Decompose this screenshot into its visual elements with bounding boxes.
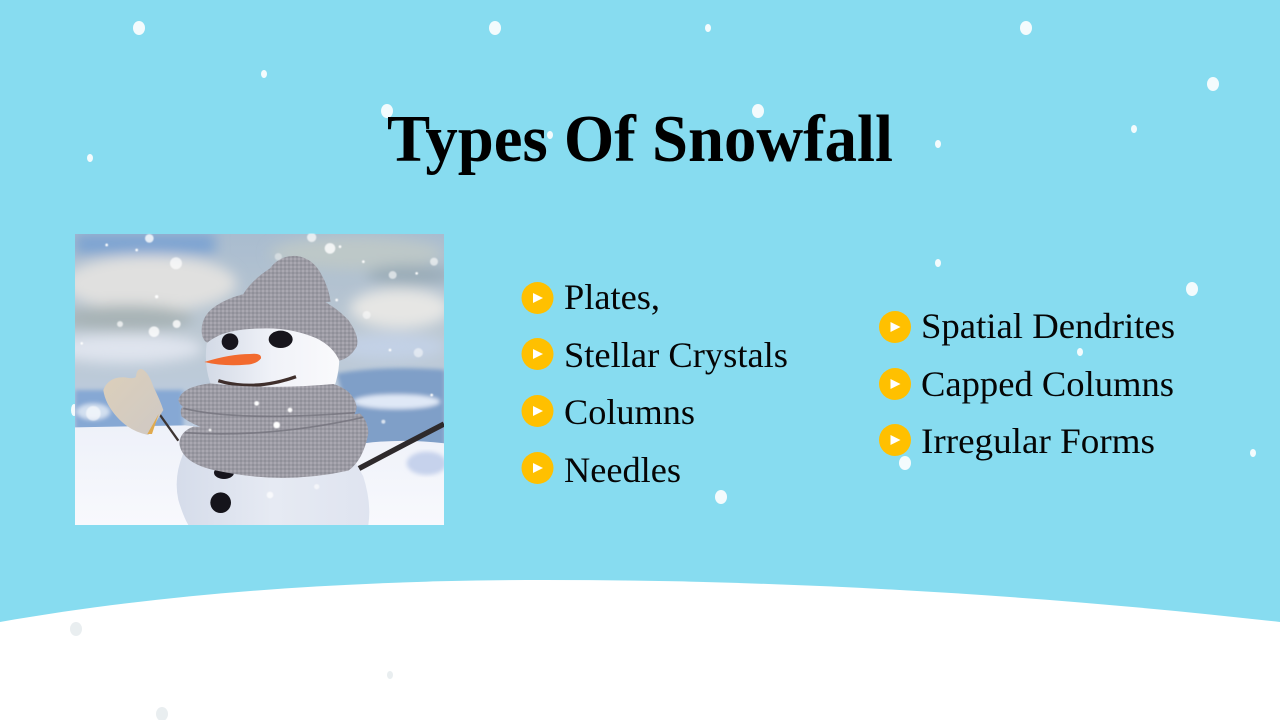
left arm bbox=[159, 414, 178, 441]
buttons bbox=[214, 470, 234, 479]
item: Plates: Plates, bbox=[564, 277, 660, 317]
item: Irregular Forms: Irregular Forms bbox=[921, 421, 1155, 461]
head bbox=[206, 328, 340, 387]
knit scarf bbox=[178, 383, 368, 478]
list: right column bbox=[879, 306, 1175, 461]
distant hills bbox=[75, 368, 445, 447]
right arm bbox=[355, 424, 444, 471]
eyes bbox=[222, 333, 238, 350]
title: Types Of Snowfall bbox=[387, 102, 893, 176]
snowman body bbox=[177, 453, 369, 525]
snow hill bbox=[0, 580, 1280, 720]
item: Capped Columns: Capped Columns bbox=[921, 364, 1174, 404]
snowy ground bbox=[75, 425, 445, 525]
item: Stellar Crystals: Stellar Crystals bbox=[564, 335, 788, 375]
item: Plates bbox=[522, 277, 660, 317]
mitten bbox=[103, 369, 163, 435]
item: Spatial Dendrites: Spatial Dendrites bbox=[921, 306, 1175, 346]
carrot nose bbox=[204, 354, 261, 365]
snowflakes bbox=[71, 21, 1256, 504]
falling snow bbox=[80, 233, 438, 498]
item: Columns: Columns bbox=[564, 392, 695, 432]
item: Needles: Needles bbox=[564, 450, 681, 490]
list: left column bbox=[522, 277, 788, 490]
knit hat bbox=[202, 256, 357, 361]
mouth bbox=[218, 377, 296, 385]
photo: snowman bbox=[50, 233, 453, 525]
